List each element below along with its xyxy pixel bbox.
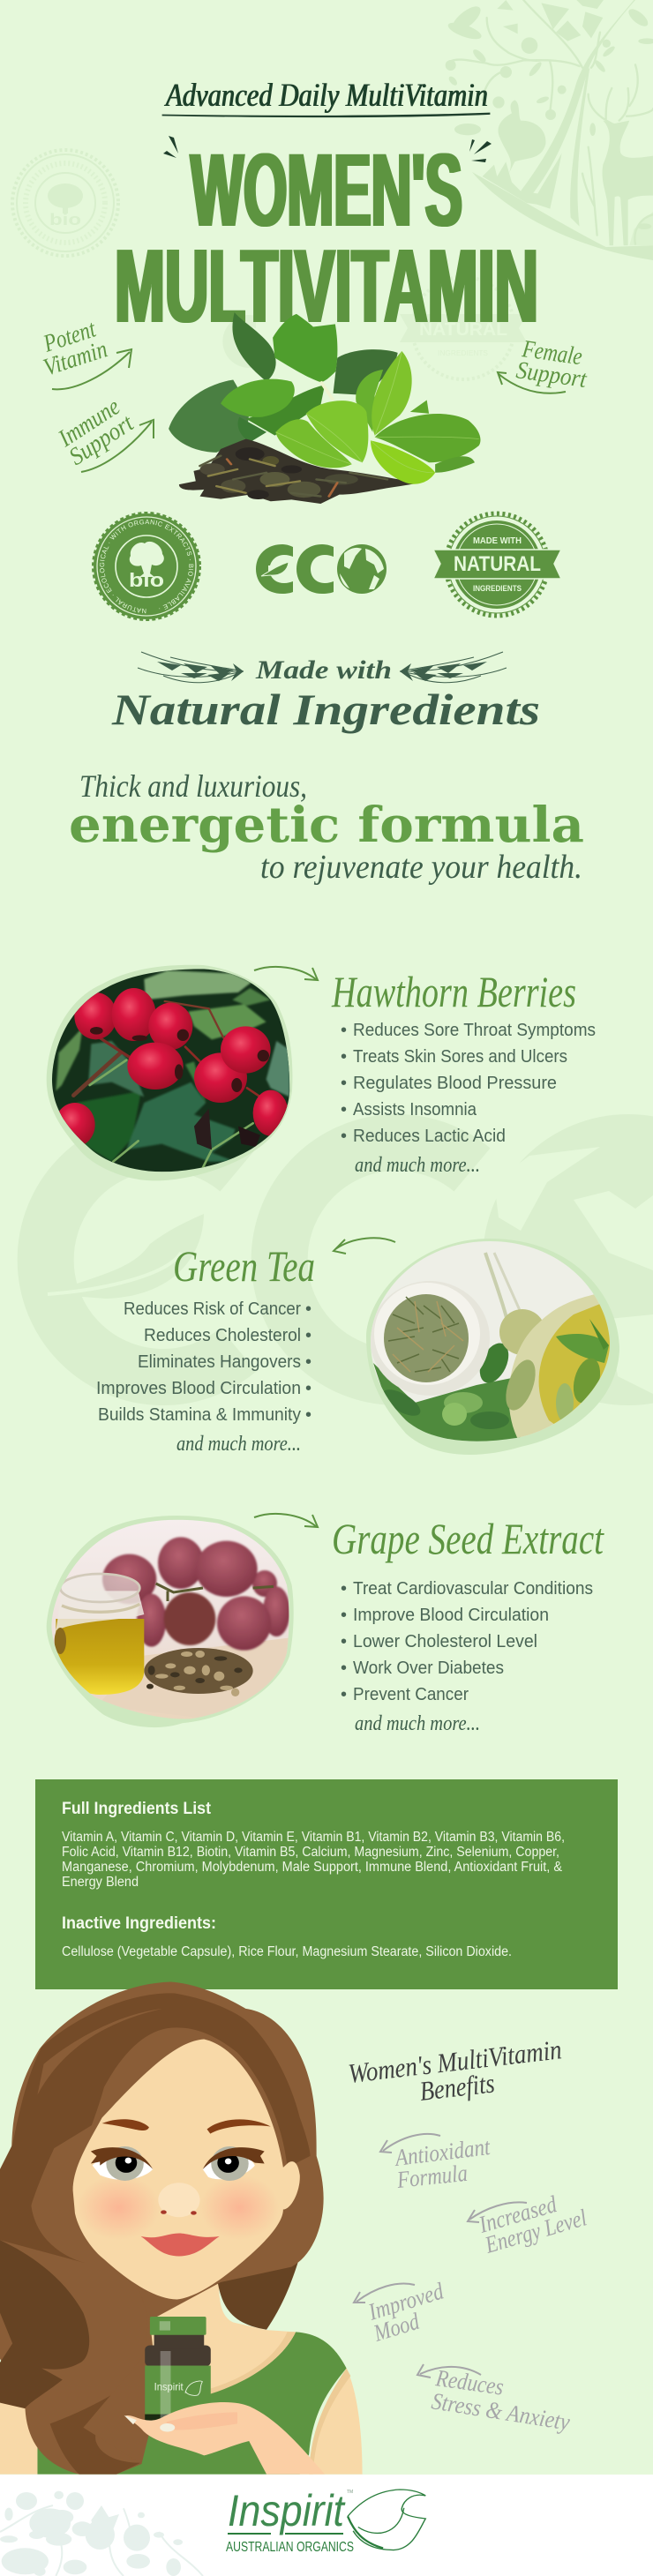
illustration: woman holding bottle: Inspirit: [154, 2381, 184, 2393]
footer floral watermark: [0, 2491, 203, 2576]
text block: green tea: •: [305, 1379, 311, 1398]
text block: hawthorn berries: •: [341, 1127, 347, 1146]
benefit: improved mood: Mood: [370, 2308, 423, 2347]
benefit: reduces stress and anxiety: Stress & Anxiety: [430, 2387, 572, 2436]
watermark: natural badge and eco logo behind leaves: NATURAL: [419, 320, 507, 340]
callout: immune support: [53, 393, 154, 472]
text block: green tea: Reduces Risk of Cancer: [124, 1299, 301, 1319]
arrow: to hawthorn heading: [254, 967, 318, 980]
text block: grape seed extract: Lower Cholesterol Level: [353, 1632, 537, 1651]
text block: green tea: and much more...: [176, 1433, 301, 1456]
text block: hawthorn berries: Hawthorn Berries: [331, 967, 576, 1016]
text block: green tea: •: [305, 1299, 311, 1319]
arrow: to grape heading: [254, 1514, 318, 1527]
logo: inspirit australian organics: TM: [347, 2490, 353, 2495]
callout: potent vitamin: [40, 315, 131, 389]
text block: green tea: •: [305, 1352, 311, 1372]
text block: hawthorn berries: Regulates Blood Pressure: [353, 1074, 557, 1093]
text block: hawthorn berries: Treats Skin Sores and Ulcers: [353, 1047, 567, 1067]
text block: benefits heading: Women's MultiVitamin: [347, 2033, 563, 2089]
callout: female support: Female: [520, 335, 584, 371]
text block: green tea: Builds Stamina & Immunity: [98, 1405, 301, 1425]
benefit: increased energy level: Increased: [476, 2190, 560, 2238]
text block: benefits heading: [347, 2033, 563, 2107]
panel: ingredients list: Cellulose (Vegetable Capsule), Rice Flour, Magnesium Stearate, Silicon Dioxide.: [62, 1944, 512, 1959]
benefit: antioxidant formula: [380, 2133, 492, 2193]
benefit: antioxidant formula: Antioxidant: [392, 2133, 492, 2171]
text block: benefits heading: Benefits: [418, 2067, 496, 2107]
watermark: natural badge and eco logo behind leaves: [222, 277, 527, 379]
callout: immune support: Immune: [53, 393, 125, 453]
heading: made with: Made with: [255, 655, 392, 685]
text block: hawthorn berries: Reduces Sore Throat Symptoms: [353, 1021, 596, 1040]
main title: [115, 132, 538, 345]
callout: female support: [498, 335, 589, 393]
text block: hawthorn berries: Reduces Lactic Acid: [353, 1127, 506, 1146]
text block: grape seed extract: Treat Cardiovascular Conditions: [353, 1579, 593, 1599]
panel: ingredients list: Manganese, Chromium, Molybdenum, Male Support, Immune Blend, Antioxidant Fruit, &: [62, 1860, 563, 1875]
text block: grape seed extract: •: [341, 1606, 347, 1625]
text block: hawthorn berries: •: [341, 1074, 347, 1093]
badge: natural: [433, 513, 561, 616]
callout: immune support: Support: [64, 409, 139, 471]
text block: green tea: •: [305, 1326, 311, 1345]
logo: inspirit australian organics: AUSTRALIAN ORGANICS: [226, 2540, 354, 2555]
text block: thick and luxurious: energetic formula: [69, 796, 584, 853]
callout: potent vitamin: Potent: [40, 315, 100, 358]
panel: ingredients list: Vitamin A, Vitamin C, Vitamin D, Vitamin E, Vitamin B1, Vitamin B2, Vitamin B3, Vitamin B6,: [62, 1830, 565, 1845]
text block: grape seed extract: [332, 1514, 604, 1735]
text block: hawthorn berries: •: [341, 1047, 347, 1067]
text block: hawthorn berries: •: [341, 1021, 347, 1040]
wheat icon right: [400, 652, 507, 683]
spark marks: [163, 136, 492, 162]
watermark: forest tree circle: [446, 0, 653, 260]
text block: hawthorn berries: Assists Insomnia: [353, 1100, 477, 1120]
panel: hawthorn berries photo: [44, 962, 300, 1182]
watermark: bio stamp: [12, 150, 118, 256]
callout: potent vitamin: Vitamin: [41, 335, 111, 382]
text block: thick and luxurious: [69, 768, 584, 886]
text block: grape seed extract: •: [341, 1632, 347, 1651]
badge: natural: MADE WITH: [473, 535, 522, 546]
text block: grape seed extract: Improve Blood Circulation: [353, 1606, 549, 1625]
text block: green tea: Improves Blood Circulation: [96, 1379, 301, 1398]
text block: green tea: Green Tea: [173, 1241, 315, 1291]
heading: natural ingredients: Natural Ingredients: [111, 685, 540, 734]
badge: natural: NATURAL: [454, 552, 541, 576]
benefit: improved mood: Improved: [364, 2277, 447, 2325]
text block: grape seed extract: Work Over Diabetes: [353, 1659, 504, 1678]
logo: inspirit australian organics: [226, 2486, 425, 2555]
panel: grape seed photo: [44, 1516, 300, 1738]
benefit: reduces stress and anxiety: Reduces: [433, 2364, 506, 2400]
text block: grape seed extract: •: [341, 1579, 347, 1599]
arrow: to green tea heading: [334, 1238, 395, 1254]
callout: female support: Support: [514, 356, 589, 393]
logo: eco: [256, 544, 387, 594]
text block: grape seed extract: •: [341, 1659, 347, 1678]
benefit: increased energy level: [468, 2190, 589, 2258]
text block: green tea: [96, 1241, 315, 1456]
wheat icon left: [138, 652, 244, 683]
tagline: Advanced Daily MultiVitamin: [164, 78, 488, 114]
watermark: natural badge and eco logo behind leaves: INGREDIENTS: [438, 349, 488, 357]
text block: thick and luxurious: to rejuvenate your health.: [260, 849, 582, 886]
text block: grape seed extract: Prevent Cancer: [353, 1685, 469, 1704]
panel: ingredients list: Folic Acid, Vitamin B12, Biotin, Vitamin B5, Calcium, Magnesium, Zinc, Selenium, Copper,: [62, 1845, 559, 1860]
panel: ingredients list: Full Ingredients List: [62, 1800, 212, 1818]
text block: green tea: Eliminates Hangovers: [138, 1352, 301, 1372]
tea leaves and dried tea photo: [169, 312, 480, 504]
panel: ingredients list: Energy Blend: [62, 1875, 139, 1890]
panel: ingredients list: Inactive Ingredients:: [62, 1914, 216, 1933]
badge: bio: bio: [129, 569, 164, 591]
text block: green tea: •: [305, 1405, 311, 1425]
text block: hawthorn berries: •: [341, 1100, 347, 1120]
text block: hawthorn berries: and much more...: [355, 1154, 480, 1177]
benefit: reduces stress and anxiety: [417, 2364, 572, 2436]
panel: green tea photo: [362, 1235, 627, 1456]
text block: grape seed extract: •: [341, 1685, 347, 1704]
watermark: large eco logo: [46, 1114, 653, 1405]
badge: natural: INGREDIENTS: [473, 584, 522, 594]
text block: green tea: Reduces Cholesterol: [144, 1326, 301, 1345]
panel: ingredients list: [35, 1779, 618, 1989]
footer band: [0, 2475, 653, 2576]
badge: bio: NATURAL · ECOLOGICAL · WITH ORGANIC EXTRACTS · BIO AVAILABLE ·: [99, 519, 194, 614]
text block: hawthorn berries: [331, 967, 596, 1177]
benefit: increased energy level: Energy Level: [482, 2204, 589, 2258]
illustration: woman holding bottle: [0, 1982, 363, 2475]
logo: inspirit australian organics: Inspirit: [228, 2486, 346, 2535]
text block: grape seed extract: and much more...: [355, 1712, 480, 1735]
benefit: antioxidant formula: Formula: [395, 2160, 469, 2193]
text block: thick and luxurious: Thick and luxurious,: [79, 768, 307, 804]
watermark: bio stamp: bio: [49, 211, 81, 228]
benefit: improved mood: [354, 2277, 447, 2347]
